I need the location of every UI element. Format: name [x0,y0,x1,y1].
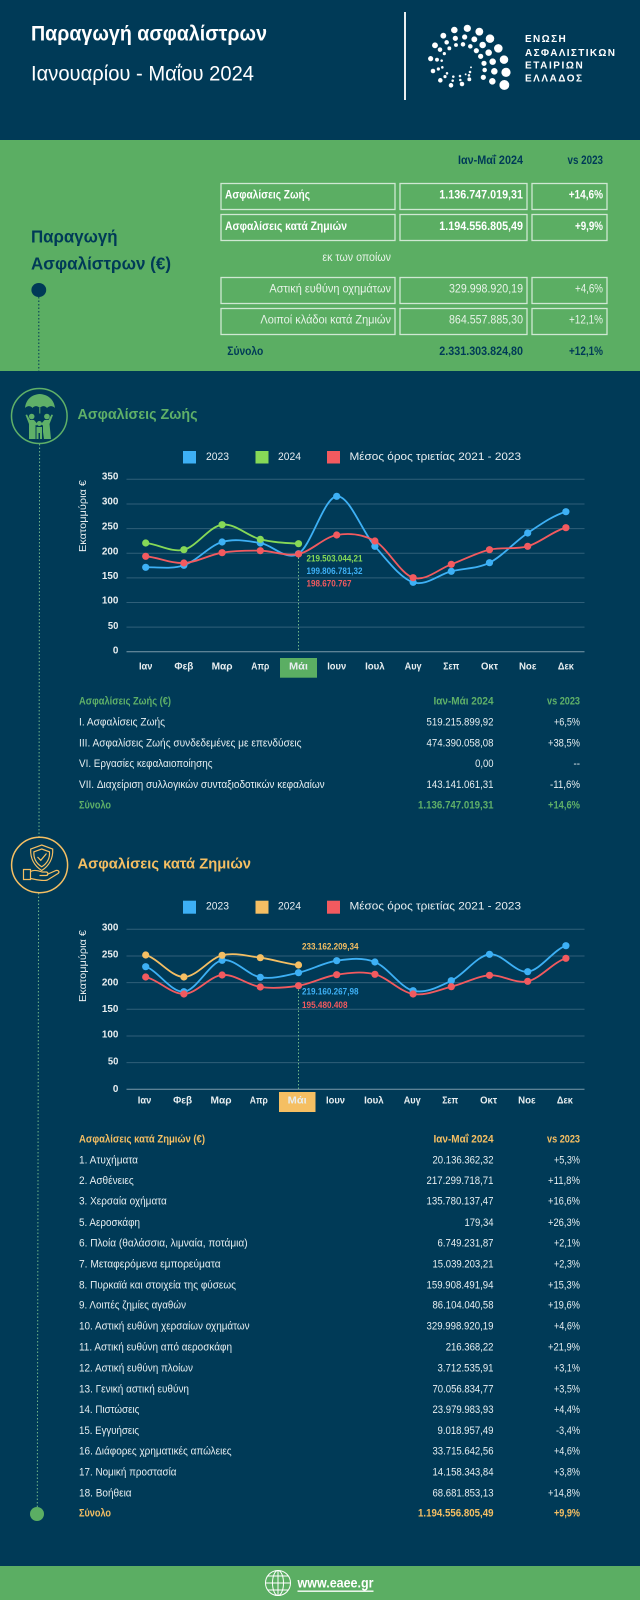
logo text [525,34,615,84]
y axis labels: 300 [102,495,119,507]
row: 3.712.535,91 [438,1362,494,1374]
May highlight [280,658,317,678]
May value labels [306,553,362,588]
row [79,1404,580,1416]
row: 14.158.343,84 [432,1466,494,1478]
total row: Σύνολο [79,800,111,812]
row: 159.908.491,94 [426,1279,494,1291]
summary row: life: Ασφαλίσεις Ζωής [225,190,310,202]
icon: shield and hand [12,837,68,893]
table: non-life insurance [79,1133,580,1520]
y axis labels [102,471,119,657]
row: 5. Αεροσκάφη [79,1217,140,1229]
panel: premium production summary [0,140,640,371]
total row [79,800,580,812]
row: +26,3% [548,1217,580,1229]
May value labels: 198.670.767 [306,578,352,588]
May value labels: 233.162.209,34 [302,942,358,952]
May value labels: 219.503.044,21 [306,553,362,563]
x axis labels: Μάι [289,661,308,673]
total row: +14,6% [548,800,580,812]
x axis labels: Νοε [518,1095,536,1107]
website link: www.eaee.gr [297,1576,374,1590]
timeline end dot [30,1507,44,1521]
row: +21,9% [548,1342,580,1354]
table: life insurance [79,696,580,812]
summary total row: 2.331.303.824,80 [439,346,523,358]
row: +14,8% [548,1487,580,1499]
y axis labels: 250 [102,521,119,533]
summary row: motor liability: +4,6% [575,284,603,296]
row [79,1258,580,1270]
y axis labels: 300 [102,921,119,933]
summary row: non-life: 1.194.556.805,49 [439,221,523,233]
line chart: non-life insurance [77,921,584,1112]
x axis labels: Απρ [250,1095,268,1107]
row: 13. Γενική αστική ευθύνη [79,1383,189,1395]
summary row: motor liability: Αστική ευθύνη οχημάτων [269,284,391,296]
row: 9. Λοιπές ζημίες αγαθών [79,1300,186,1312]
summary row: life [221,184,607,210]
logo [404,12,615,100]
row [79,737,580,749]
row: 143.141.061,31 [426,779,494,791]
row [79,758,580,770]
total row: 1.136.747.019,31 [418,800,494,812]
row: -- [574,758,580,770]
logo text: ΕΛΛΑΔΟΣ [525,74,582,84]
May value labels: 219.160.267,98 [302,987,358,997]
row: 16. Διάφορες χρηματικές απώλειες [79,1446,232,1458]
row [79,716,580,728]
row [79,1321,580,1333]
row [79,1175,580,1187]
summary column headers [458,155,603,167]
row: +15,3% [548,1279,580,1291]
y axis title: Εκατομμύρια € [77,930,89,1002]
icon: umbrella and family [12,388,67,444]
row [79,1466,580,1478]
row: 2. Ασθένειες [79,1175,134,1187]
x axis labels: Δεκ [557,1095,573,1107]
row: 179,34 [464,1217,494,1229]
series: 2024 [142,521,302,553]
heading: premium production: Παραγωγή [31,226,118,246]
row: 15.039.203,21 [432,1258,494,1270]
row: +3,8% [554,1466,580,1478]
row: ΙΙΙ. Ασφαλίσεις Ζωής συνδεδεμένες με επενδύσεις [79,737,302,749]
legend: non-life chart [183,901,521,914]
row: 18. Βοήθεια [79,1487,132,1499]
y axis labels: 0 [113,1083,119,1095]
table header: Ιαν-Μάι 2024 [434,696,494,708]
x axis labels: Μαρ [210,1095,232,1107]
row: -11,6% [550,779,580,791]
table header: vs 2023 [547,1133,580,1145]
row: 519.215.899,92 [426,716,494,728]
y axis labels: 200 [102,546,119,558]
icon: globe [266,1570,290,1596]
series: 2023 [142,493,570,586]
y axis labels: 200 [102,977,119,989]
summary row: other non-life: +12,1% [569,314,603,326]
y axis labels: 50 [108,620,119,632]
y axis labels: 150 [102,1003,119,1015]
series: 2024 [142,951,302,981]
header [31,12,615,100]
row [79,1196,580,1208]
summary row: life: 1.136.747.019,31 [439,190,524,202]
logo text: ΑΣΦΑΛΙΣΤΙΚΩΝ [525,48,615,59]
icon: logo dots [428,25,510,90]
row: 17. Νομική προστασία [79,1466,176,1478]
row: +3,5% [554,1383,580,1395]
x axis labels: Ιουλ [364,1095,384,1107]
summary row: other non-life: Λοιποί κλάδοι κατά Ζημιών [260,314,391,326]
y axis labels: 50 [108,1055,119,1067]
row: Ι. Ασφαλίσεις Ζωής [79,716,165,728]
heading: non-life insurance: Ασφαλίσεις κατά Ζημιών [78,857,251,873]
row: VI. Εργασίες κεφαλαιοποίησης [79,758,212,770]
y axis labels: 350 [102,471,119,483]
row: 23.979.983,93 [432,1404,494,1416]
legend: life chart [183,451,521,464]
x axis labels: Φεβ [173,1095,193,1107]
row: 70.056.834,77 [432,1383,494,1395]
legend: life chart: Μέσος όρος τριετίας 2021 - 2023 [350,451,521,463]
timeline [37,444,40,1507]
summary column headers: Ιαν-Μαΐ 2024 [458,155,524,167]
total row: Σύνολο [79,1508,111,1520]
x axis labels: Ιουν [327,661,346,673]
x axis labels [139,661,574,673]
y axis labels: 250 [102,948,119,960]
row [79,1300,580,1312]
x axis labels: Οκτ [481,661,498,673]
summary row: non-life: +9,9% [575,221,603,233]
summary row: life: +14,6% [569,190,603,202]
row [79,1383,580,1395]
y axis labels: 100 [102,595,119,607]
total row: +9,9% [554,1508,580,1520]
table header: vs 2023 [547,696,580,708]
table header [79,696,580,708]
x axis labels [138,1095,573,1107]
row: 8. Πυρκαϊά και στοιχεία της φύσεως [79,1279,236,1291]
row: 86.104.040,58 [432,1300,494,1312]
row [79,1487,580,1499]
table header: Ασφαλίσεις Ζωής (€) [79,696,171,708]
row: 7. Μεταφερόμενα εμπορεύματα [79,1258,221,1270]
row: +2,1% [554,1238,580,1250]
x axis labels: Δεκ [558,661,574,673]
x axis labels: Απρ [251,661,270,673]
legend: non-life chart: 2024 [278,901,301,913]
summary row: motor liability [221,278,607,304]
logo text: ΕΝΩΣΗ [525,34,566,45]
row [79,1425,580,1437]
x axis labels: Αυγ [404,1095,421,1107]
summary row: other non-life [221,308,607,334]
row: 9.018.957,49 [438,1425,494,1437]
summary row: non-life: Ασφαλίσεις κατά Ζημιών [225,221,347,233]
May highlight [279,1092,316,1112]
row: 11. Αστική ευθύνη από αεροσκάφη [79,1342,232,1354]
y axis labels: 150 [102,570,119,582]
logo text: ΕΤΑΙΡΙΩΝ [525,60,583,72]
x axis labels: Οκτ [480,1095,497,1107]
heading: premium production [31,226,171,274]
summary row: non-life [221,214,607,240]
x axis labels: Ιουλ [365,661,385,673]
row: 14. Πιστώσεις [79,1404,139,1416]
series: three-year average [142,524,570,581]
row: +11,8% [548,1175,580,1187]
row: 68.681.853,13 [432,1487,494,1499]
summary total row: +12,1% [569,346,603,358]
series: 2023 [142,942,570,995]
total row: 1.194.556.805,49 [418,1508,494,1520]
row [79,1155,580,1167]
row: 20.136.362,32 [432,1155,494,1167]
row: +19,6% [548,1300,580,1312]
row: 6.749.231,87 [438,1238,494,1250]
May value labels: 199.806.781,32 [306,566,362,576]
May value labels: 195.480.408 [302,1000,348,1010]
y axis labels [102,921,119,1095]
table header: Ιαν-Μαΐ 2024 [434,1133,494,1145]
row: 135.780.137,47 [426,1196,494,1208]
May value labels [302,942,358,1010]
summary row: motor liability: 329.998.920,19 [449,284,523,296]
row: +6,5% [554,716,580,728]
of which label: εκ των οποίων [322,252,391,264]
heading: premium production: Ασφαλίστρων (€) [31,254,171,274]
row: -3,4% [556,1425,580,1437]
summary total row: Σύνολο [227,346,263,358]
title: Παραγωγή ασφαλίστρων [31,22,267,46]
row [79,779,580,791]
row: 1. Ατυχήματα [79,1155,138,1167]
row [79,1279,580,1291]
row [79,1342,580,1354]
row: +4,6% [554,1446,580,1458]
row: +5,3% [554,1155,580,1167]
summary row: other non-life: 864.557.885,30 [449,314,523,326]
x axis labels: Μάι [288,1095,307,1107]
row: 33.715.642,56 [432,1446,494,1458]
footer [0,1566,640,1600]
row: 3. Χερσαία οχήματα [79,1196,167,1208]
x axis labels: Σεπ [442,1095,458,1107]
x axis labels: Σεπ [443,661,459,673]
x axis labels: Ιαν [138,1095,151,1107]
legend: life chart: 2023 [206,451,229,463]
timeline start dot [31,283,46,371]
row: +2,3% [554,1258,580,1270]
legend: life chart: 2024 [278,451,301,463]
row: 217.299.718,71 [426,1175,494,1187]
row: 0,00 [475,758,494,770]
y axis labels: 100 [102,1029,119,1041]
x axis labels: Ιαν [139,661,153,673]
row: +38,5% [548,737,580,749]
x axis labels: Νοε [519,661,536,673]
heading: life insurance: Ασφαλίσεις Ζωής [78,407,198,423]
row [79,1446,580,1458]
y axis labels: 0 [113,645,119,657]
row: 12. Αστική ευθύνη πλοίων [79,1362,193,1374]
table header [79,1133,580,1145]
row: 216.368,22 [446,1342,494,1354]
x axis labels: Ιουν [326,1095,345,1107]
subtitle: Ιανουαρίου - Μαΐου 2024 [31,62,254,86]
row [79,1217,580,1229]
x axis labels: Μαρ [212,661,233,673]
row: 474.390.058,08 [426,737,494,749]
table header: Ασφαλίσεις κατά Ζημιών (€) [79,1133,205,1145]
row: +16,6% [548,1196,580,1208]
summary total row [227,346,603,358]
row [79,1238,580,1250]
legend: non-life chart: 2023 [206,901,229,913]
row [79,1362,580,1374]
row: VII. Διαχείριση συλλογικών συνταξιοδοτικών κεφαλαίων [79,779,325,791]
row: +3,1% [554,1362,580,1374]
line chart: life insurance [77,471,584,678]
row: 15. Εγγυήσεις [79,1425,139,1437]
row: 329.998.920,19 [426,1321,494,1333]
series: three-year average [142,955,570,998]
row: 6. Πλοία (θαλάσσια, λιμναία, ποτάμια) [79,1238,248,1250]
row: 10. Αστική ευθύνη χερσαίων οχημάτων [79,1321,250,1333]
summary column headers: vs 2023 [568,155,603,167]
legend: non-life chart: Μέσος όρος τριετίας 2021 - 2023 [350,901,521,913]
x axis labels: Φεβ [174,661,194,673]
row: +4,6% [554,1321,580,1333]
x axis labels: Αυγ [405,661,422,673]
y axis title: Εκατομμύρια € [77,480,89,552]
total row [79,1508,580,1520]
row: +4,4% [554,1404,580,1416]
